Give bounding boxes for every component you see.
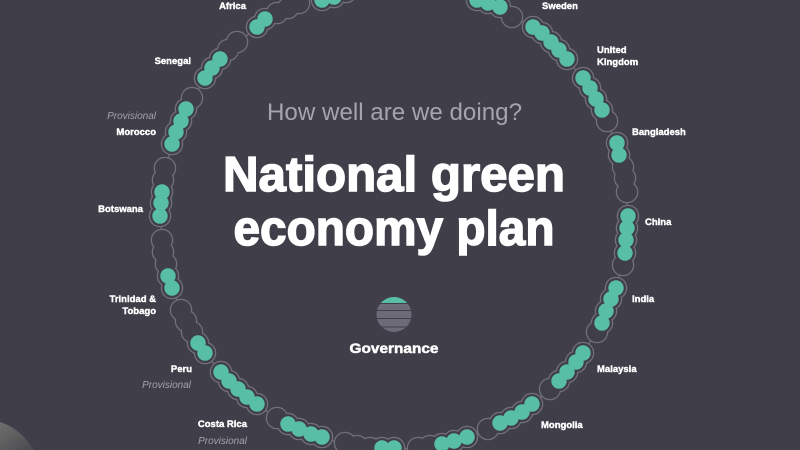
country: bottom right group <box>418 437 467 448</box>
country: Bangladesh: Bangladesh <box>632 127 686 138</box>
country: Bangladesh <box>617 127 686 192</box>
country: Sweden <box>533 1 578 59</box>
country: China: China <box>645 217 672 228</box>
country: Trinidad and Tobago: Tobago <box>122 306 156 317</box>
country: United Kingdom <box>583 45 638 121</box>
country: unnamed top right group <box>477 0 512 17</box>
country: Botswana: Botswana <box>98 204 144 215</box>
country: Mongolia: Mongolia <box>541 420 583 431</box>
country: Africa group <box>219 1 299 27</box>
country: unnamed group after Peru <box>221 372 257 404</box>
title: National green <box>223 148 565 202</box>
country: Costa Rica: Costa Rica <box>198 419 248 430</box>
country: Peru <box>142 310 205 391</box>
title <box>223 148 565 256</box>
country: bottom centre group <box>345 443 394 448</box>
country: Morocco: Provisional <box>107 111 157 122</box>
country: China <box>623 216 672 265</box>
country: Costa Rica: Provisional <box>198 436 248 447</box>
country: Trinidad and Tobago: Trinidad & <box>110 294 156 305</box>
country: Africa group: Africa <box>219 1 247 12</box>
country: Peru: Peru <box>171 364 192 375</box>
country: India: India <box>632 294 655 305</box>
country: United Kingdom: United <box>597 45 627 56</box>
country: Senegal: Senegal <box>155 56 191 67</box>
country: India <box>597 288 655 332</box>
country: Malaysia: Malaysia <box>597 364 637 375</box>
icon: governance indicator <box>376 297 412 332</box>
country: Mongolia <box>488 404 583 431</box>
country: Sweden: Sweden <box>542 1 578 12</box>
label: Governance: Governance <box>350 340 439 356</box>
country: Morocco <box>107 98 192 144</box>
photo fragment bottom left <box>0 422 34 450</box>
title: economy plan <box>234 202 554 256</box>
country: Costa Rica <box>198 418 322 447</box>
country: United Kingdom: Kingdom <box>597 57 638 68</box>
country: Peru: Provisional <box>142 380 192 391</box>
country: Malaysia <box>550 353 637 389</box>
country: Botswana <box>98 168 165 216</box>
country: Senegal <box>155 42 237 78</box>
subtitle: How well are we doing? <box>267 99 522 126</box>
country: Trinidad and Tobago <box>110 240 172 317</box>
country: Morocco: Morocco <box>116 127 156 138</box>
